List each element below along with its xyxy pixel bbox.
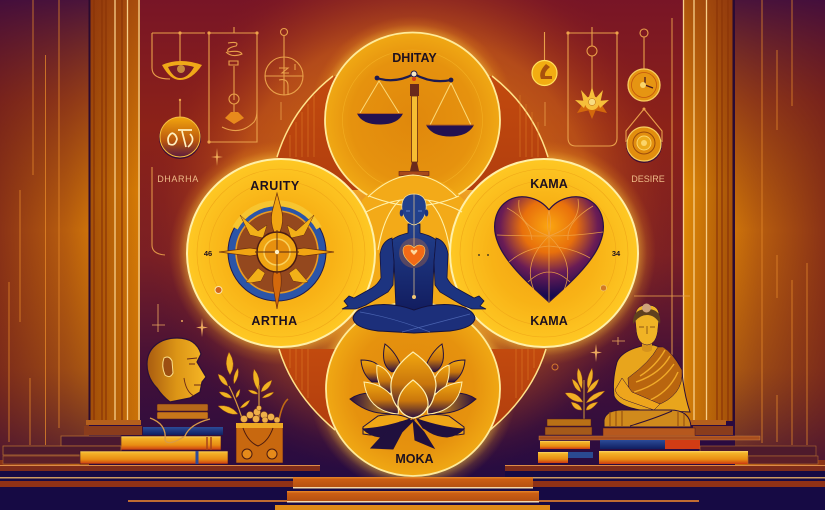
central web of overlapping arcs bbox=[366, 175, 462, 250]
treasure nuggets bbox=[240, 406, 280, 423]
panel: ARTHA circle with compass bbox=[187, 159, 375, 347]
background: inner hall with golden glow bbox=[140, 0, 685, 510]
icon: squiggle and pendant bbox=[222, 42, 257, 131]
heading: DHITAY: DHITAY bbox=[392, 51, 437, 65]
number: 46: 46 bbox=[204, 249, 212, 258]
panel: KAMA circle with heart bbox=[450, 159, 638, 347]
icon: hanging target medal bbox=[626, 108, 662, 163]
icon: right plant on steps bbox=[545, 368, 605, 435]
books and steps on the left bbox=[3, 418, 228, 464]
icon: lotus bbox=[350, 344, 476, 449]
heading: KAMA lower: KAMA bbox=[530, 314, 568, 328]
label: DHARHA: DHARHA bbox=[157, 174, 199, 184]
icon: eye bbox=[162, 61, 202, 80]
panel: DHITAY circle with scales bbox=[325, 32, 500, 208]
icon: heart bbox=[495, 197, 603, 302]
symbol frames: upper left bbox=[152, 27, 303, 255]
figure: meditating person bbox=[342, 194, 486, 333]
heading: KAMA upper: KAMA bbox=[530, 177, 568, 191]
icon: balance scales bbox=[357, 71, 474, 176]
icon: chest heart bbox=[399, 238, 429, 268]
icon: Dharma medal bbox=[159, 99, 201, 159]
icon: ringed glyph bbox=[265, 28, 303, 120]
left column bbox=[84, 0, 142, 435]
torso bbox=[392, 224, 436, 310]
figure: head bust on pedestal bbox=[147, 338, 208, 419]
heading: ARUITY: ARUITY bbox=[250, 179, 300, 193]
icon: flower bbox=[575, 87, 609, 119]
icon: compass wheel bbox=[219, 193, 334, 309]
icon: small bead bbox=[600, 285, 606, 291]
right column bbox=[683, 0, 734, 435]
head bbox=[402, 194, 426, 225]
heading: MOKA: MOKA bbox=[395, 452, 434, 466]
left arm bbox=[342, 238, 394, 309]
icon: small gold medal bbox=[532, 32, 557, 126]
icon: plant and treasure chest bbox=[218, 352, 288, 463]
heading: ARTHA: ARTHA bbox=[251, 314, 298, 328]
crossed legs bbox=[353, 305, 475, 333]
number: 34: 34 bbox=[612, 249, 621, 258]
sparkles right bbox=[552, 337, 625, 370]
right arm bbox=[434, 238, 486, 309]
central yellow dome between circles bbox=[362, 175, 464, 315]
figure: seated Buddha bbox=[603, 304, 695, 436]
floor bands bbox=[0, 465, 825, 510]
icon: sparkle bbox=[211, 148, 223, 166]
sparkles left bbox=[152, 304, 208, 337]
books and steps on the right bbox=[538, 436, 818, 464]
label: DESIRE: DESIRE bbox=[631, 174, 665, 184]
panel: MOKA circle with lotus bbox=[326, 302, 500, 476]
icon: clock bbox=[628, 29, 660, 101]
symbol frames: upper right bbox=[532, 18, 690, 420]
lens: striped arcs behind circles bbox=[277, 76, 548, 430]
icon: tiny charm bbox=[215, 286, 222, 294]
